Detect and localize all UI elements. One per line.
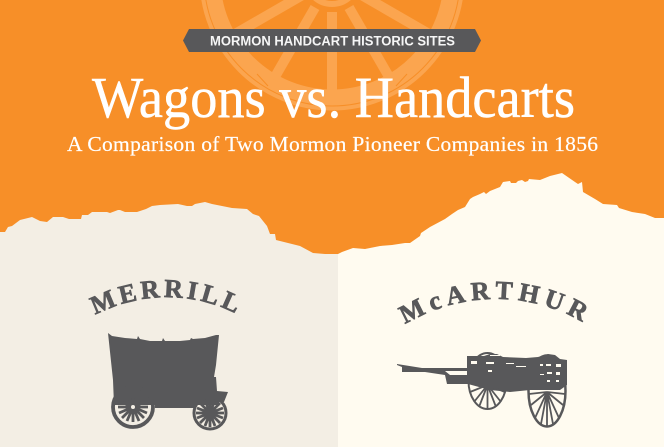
icon: covered wagon <box>108 333 228 429</box>
heading: McArthur: McARTHUR <box>397 281 586 324</box>
banner: Mormon Handcart Historic Sites <box>183 29 481 52</box>
icon: wagon wheel watermark <box>204 0 460 106</box>
panel: McArthur terrain <box>338 173 664 447</box>
subtitle: A Comparison of Two Mormon Pioneer Companies in 1856 <box>67 132 598 156</box>
heading: Merrill: MERRILL <box>88 280 238 315</box>
title: Wagons vs. Handcarts <box>92 65 575 130</box>
panel: Merrill terrain <box>0 202 338 447</box>
icon: handcart <box>397 353 567 426</box>
banner: Mormon Handcart Historic Sites: MORMON HANDCART HISTORIC SITES <box>210 34 455 48</box>
